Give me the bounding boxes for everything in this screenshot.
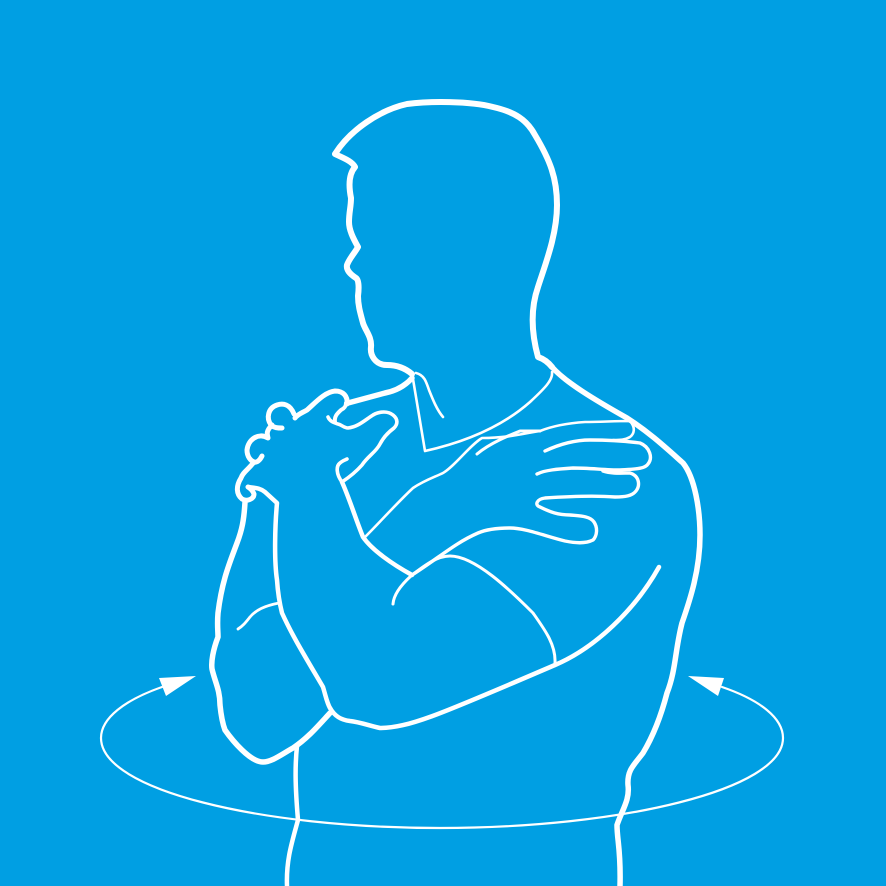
collar	[412, 372, 552, 451]
torso left outline	[287, 746, 298, 886]
upper arm edge	[342, 482, 412, 575]
left arrowhead	[159, 676, 196, 696]
shoulder and torso right outline	[552, 367, 700, 886]
forearm underside and sleeve	[330, 567, 659, 728]
right arrowhead	[688, 676, 724, 696]
wrist crease	[238, 603, 279, 629]
thumb and fingers of left hand	[328, 412, 397, 482]
upper arm and right hand	[365, 421, 650, 575]
sleeve curve	[393, 556, 555, 663]
hand on left with knuckles and forearm	[212, 391, 347, 762]
rotation ellipse with arrowheads	[101, 676, 783, 828]
collar line behind hand	[348, 378, 412, 403]
head and neck outline	[335, 102, 557, 374]
